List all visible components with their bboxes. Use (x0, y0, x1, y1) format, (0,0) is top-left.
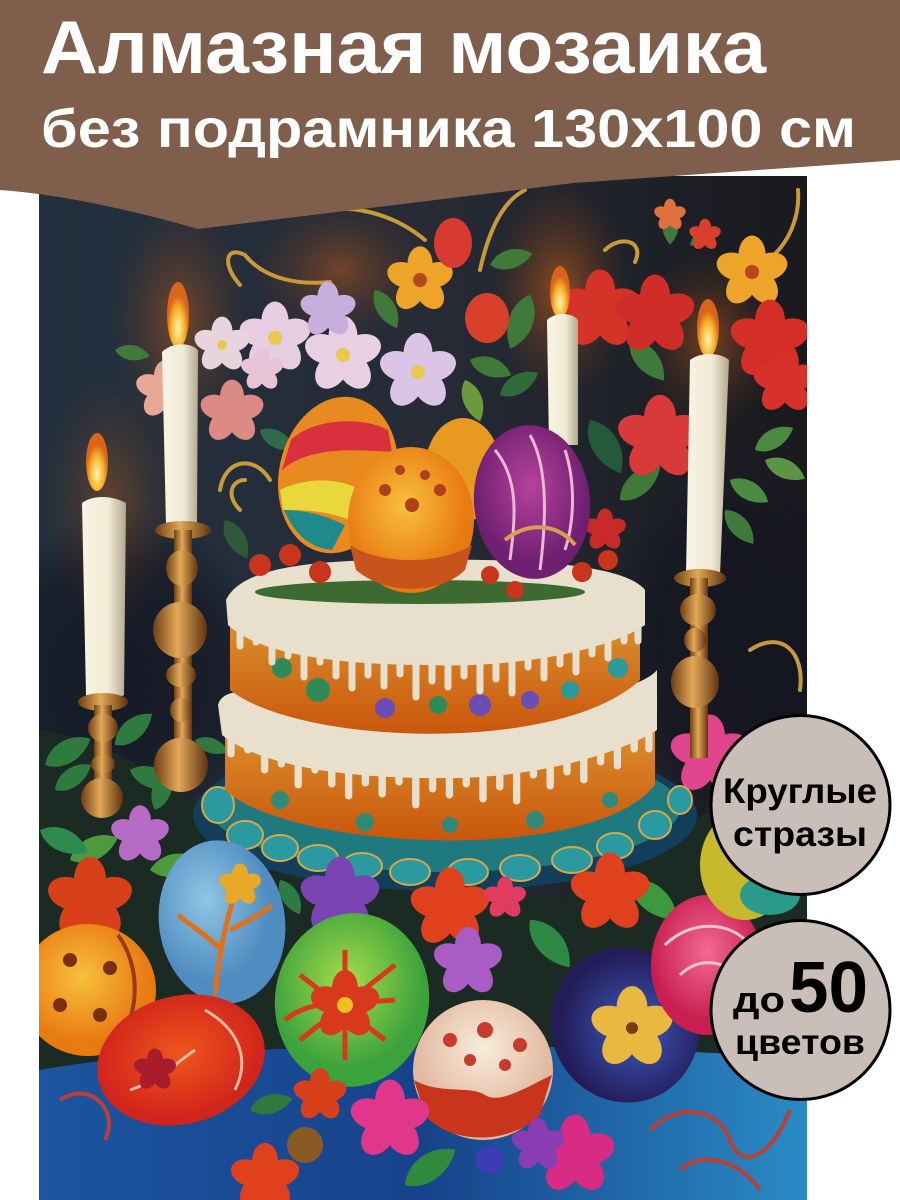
badge: round rhinestones: стразы (733, 815, 867, 854)
candle 2 with holder (153, 282, 211, 792)
egg: cream and red (413, 1000, 553, 1140)
painting: Easter cake with candles and eggs (39, 176, 807, 1200)
egg: navy with yellow flower (550, 948, 700, 1102)
egg: orange back (428, 418, 494, 520)
egg: blue with orange branch (158, 840, 286, 1004)
candle 1 with holder (78, 433, 128, 818)
top banner (0, 0, 900, 229)
flowers on the tablecloth (227, 1068, 618, 1200)
yellow flowers (384, 236, 791, 315)
berries under the eggs (249, 544, 618, 604)
badge: up to 50 colours (711, 920, 890, 1100)
egg: striped (278, 396, 396, 554)
title line 2: без подрамника 130х100 см (41, 99, 856, 159)
cake stand (193, 773, 697, 890)
cake bottom layer (218, 670, 657, 840)
egg: green with red flower (274, 913, 430, 1087)
badge: round rhinestones (711, 716, 890, 894)
candle 3 (547, 266, 578, 445)
pink and white flowers (133, 282, 460, 445)
gold scroll ornaments (220, 190, 801, 690)
title line 1: Алмазная мозаика (41, 5, 767, 89)
flowers in front of the stand (297, 852, 653, 998)
tablecloth (39, 1046, 807, 1200)
badge: up to 50 colours: цветов (735, 1023, 865, 1062)
leaves behind the flowers (114, 205, 809, 563)
lower foliage (35, 706, 807, 1090)
egg: purple (474, 425, 590, 579)
egg: pink (651, 895, 763, 1035)
candle 4 with holder (671, 299, 729, 758)
cake top layer (226, 560, 645, 734)
badge: round rhinestones: Круглые (723, 772, 877, 811)
red flowers and tulips (434, 199, 820, 552)
egg: yellow-green partly hidden (700, 827, 800, 920)
egg: red (97, 994, 265, 1126)
painting background (39, 176, 807, 900)
badge: up to 50 colours: 50 (789, 948, 868, 1028)
badge: up to 50 colours: до (733, 979, 785, 1020)
egg: orange front (348, 447, 474, 593)
egg: orange dotted (39, 924, 156, 1056)
